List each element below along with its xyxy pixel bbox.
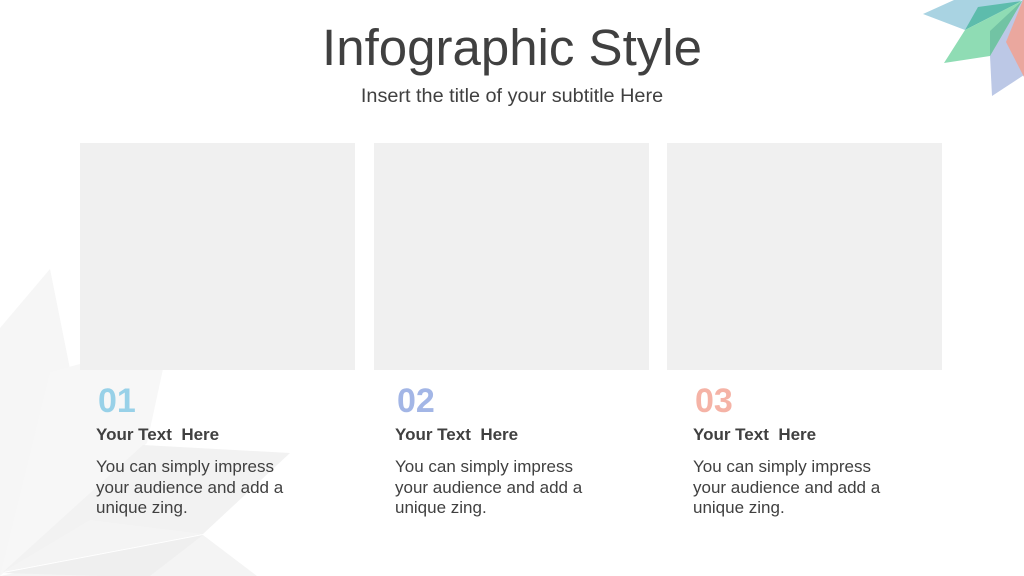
text column 1 — [96, 457, 284, 517]
image placeholder 3 — [667, 143, 942, 370]
heading column 1: Your Text Here — [96, 425, 219, 444]
image placeholder 1 — [80, 143, 355, 370]
heading column 3: Your Text Here — [693, 425, 816, 444]
decoration: coloured polygon burst top right — [923, 0, 1024, 96]
text column 3: You can simply impress — [693, 457, 871, 476]
subtitle: Insert the title of your subtitle Here — [361, 85, 663, 107]
text column 1: your audience and add a — [96, 478, 283, 497]
heading column 2: Your Text Here — [395, 425, 518, 444]
text column 1: unique zing. — [96, 498, 188, 517]
image placeholder 2 — [374, 143, 649, 370]
title: Infographic Style — [322, 19, 702, 76]
number 02: 02 — [397, 382, 435, 420]
text column 2: unique zing. — [395, 498, 487, 517]
text column 3 — [693, 457, 880, 517]
text column 2: your audience and add a — [395, 478, 582, 497]
number 03: 03 — [695, 382, 733, 420]
text column 3: unique zing. — [693, 498, 785, 517]
number 01: 01 — [98, 382, 136, 420]
text column 3: your audience and add a — [693, 478, 880, 497]
text column 1: You can simply impress — [96, 457, 274, 476]
text column 2 — [395, 457, 582, 517]
text column 2: You can simply impress — [395, 457, 573, 476]
decoration: grey polygon burst bottom left — [0, 270, 290, 576]
